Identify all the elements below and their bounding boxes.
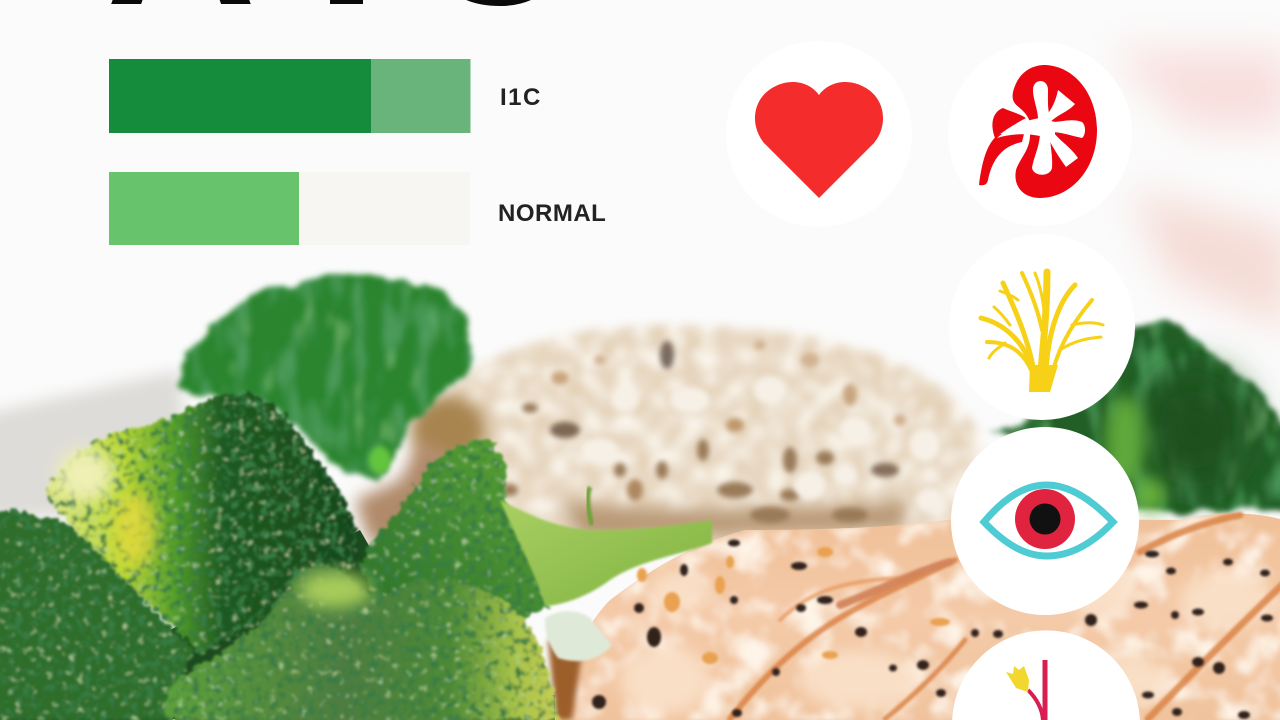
- middle broccoli floret: [45, 393, 359, 655]
- centre broccoli floret: [360, 440, 548, 620]
- white vegetable piece: [545, 611, 612, 661]
- bar: normal: [109, 172, 470, 245]
- broccoli stem: [500, 487, 712, 606]
- bottom broccoli floret: [165, 565, 560, 720]
- rice grains light: [582, 376, 944, 512]
- rice pile: [410, 325, 985, 545]
- bar chart: I1C vs normal: [109, 59, 606, 245]
- brown shadow beside salmon: [548, 640, 584, 720]
- back broccoli highlight: [369, 446, 391, 474]
- bottom-left broccoli floret: [0, 510, 195, 720]
- kidney calyx lobes: [997, 81, 1085, 175]
- bar: I1C: [109, 59, 470, 133]
- right broccoli: [990, 321, 1280, 513]
- salmon light patches: [620, 560, 1270, 715]
- salmon black seeds: [592, 540, 1273, 719]
- brown stem gap: [355, 440, 480, 545]
- icon: nerve branches: [949, 234, 1135, 420]
- icon: blood vessel, cropped at bottom edge: [952, 630, 1140, 720]
- icon: heart: [726, 41, 912, 227]
- salmon seasoning flecks: [637, 547, 950, 664]
- label: normal: NORMAL: [498, 200, 606, 227]
- dark backing between florets: [0, 530, 400, 720]
- icon: kidney: [948, 42, 1132, 226]
- salmon fillet: [556, 513, 1280, 720]
- background: pink blurred backdrop: [1110, 50, 1280, 330]
- grill marks: [730, 515, 1280, 719]
- icon: eye: [951, 427, 1139, 615]
- back broccoli floret: [178, 272, 472, 480]
- plate edge: [0, 370, 190, 520]
- rice grains dark: [502, 340, 906, 523]
- label: I1C: I1C: [500, 84, 542, 111]
